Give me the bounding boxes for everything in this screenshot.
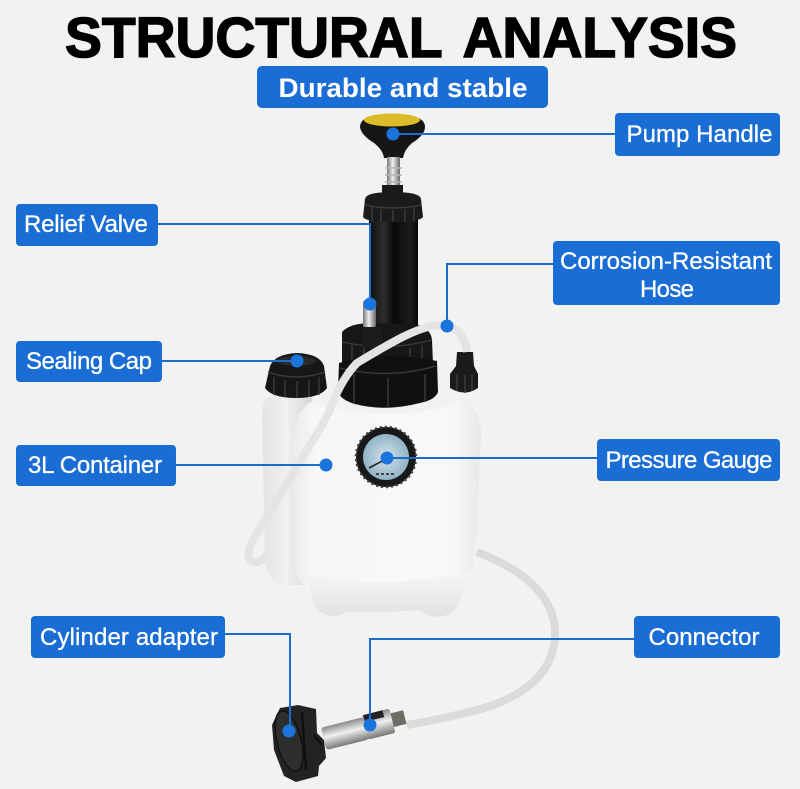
callout: corrosion-resistant hose: Corrosion-Resistant xyxy=(560,248,772,275)
delivery tube xyxy=(407,552,555,725)
callout: 3L container: 3L Container xyxy=(28,452,162,479)
callout: pump handle: Pump Handle xyxy=(626,121,772,148)
front container xyxy=(293,400,481,617)
sealing cap xyxy=(265,353,327,398)
cylinder adapter knob xyxy=(270,705,326,782)
base flange xyxy=(338,356,438,408)
callout: corrosion-resistant hose xyxy=(440,241,780,332)
pump cylinder xyxy=(369,218,418,330)
callout: connector xyxy=(364,616,780,732)
quick connector xyxy=(320,705,408,750)
right small cap xyxy=(450,352,478,393)
callout: pressure gauge: Pressure Gauge xyxy=(606,447,772,474)
callout: sealing cap xyxy=(16,341,304,382)
pressure gauge xyxy=(356,427,416,487)
rear container xyxy=(262,396,312,585)
callout: pressure gauge xyxy=(380,439,780,481)
pump shaft xyxy=(385,157,402,189)
callout: cylinder adapter: Cylinder adapter xyxy=(40,624,218,651)
product: brake bleeder pump xyxy=(248,114,555,782)
callout: relief valve: Relief Valve xyxy=(24,211,148,238)
callout: 3L container xyxy=(16,445,332,486)
callout: connector: Connector xyxy=(648,624,760,651)
callout: relief valve xyxy=(16,204,376,310)
callout: sealing cap: Sealing Cap xyxy=(26,348,152,375)
lower screw cap xyxy=(342,323,433,366)
shaft collar xyxy=(382,185,403,199)
callout: cylinder adapter xyxy=(31,616,296,738)
subtitle badge xyxy=(257,66,548,108)
relief valve xyxy=(362,300,382,348)
front container base shading xyxy=(310,572,472,617)
cylinder top cap xyxy=(363,192,423,222)
callout: pump handle xyxy=(386,113,780,156)
title: STRUCTURAL ANALYSIS xyxy=(65,6,737,70)
subtitle badge: Durable and stable xyxy=(278,73,528,103)
hose xyxy=(248,325,467,562)
callout: corrosion-resistant hose: Hose xyxy=(640,276,694,303)
pump handle knob xyxy=(360,114,425,158)
